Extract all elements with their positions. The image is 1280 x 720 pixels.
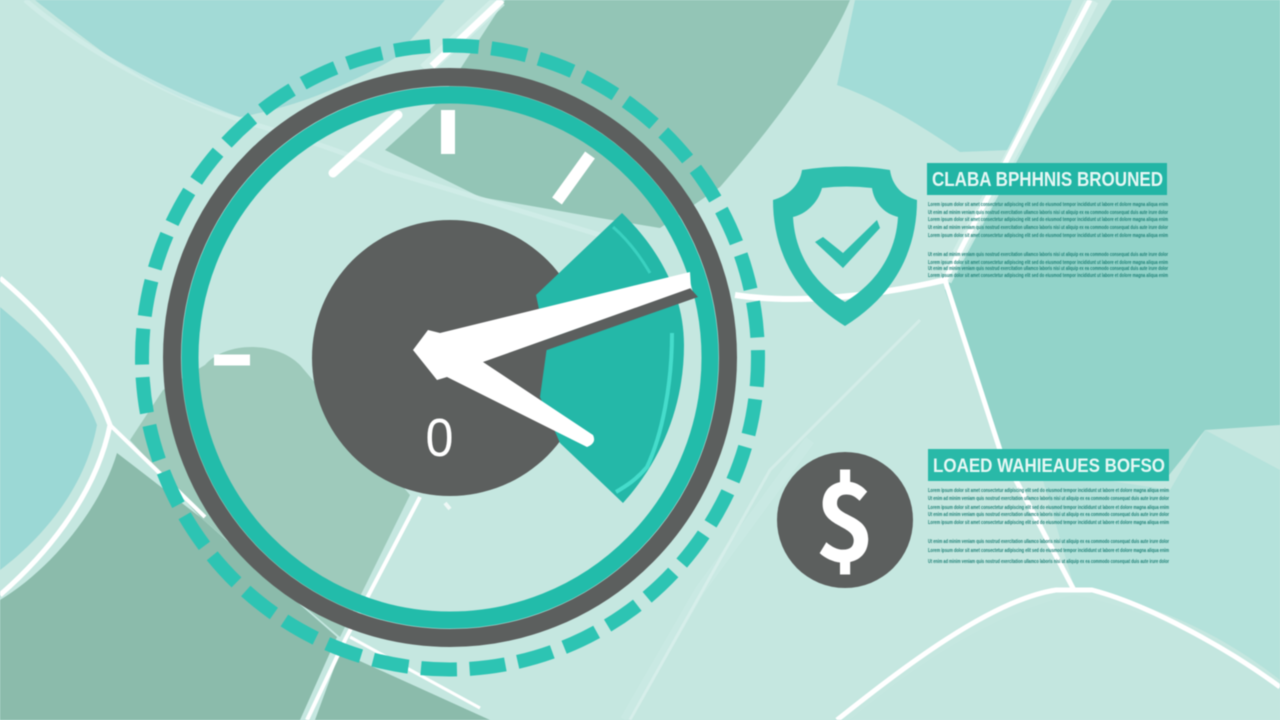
- text block: first body: Ut enim ad minim veniam quis nostrud exercitation ullamco laboris nisi ut aliquip ex ea commodo consequat duis aute irure dolor: [928, 266, 1169, 272]
- gauge: teal ring: [190, 95, 710, 620]
- text block: second body: Lorem ipsum dolor sit amet consectetur adipiscing elit sed do eiusmod tempor incididunt ut labore et dolore magna aliqua enim: [928, 548, 1169, 554]
- text block: first body: Lorem ipsum dolor sit amet consectetur adipiscing elit sed do eiusmod tempor incididunt ut labore et dolore magna aliqua enim: [928, 202, 1168, 208]
- text block: second body: Ut enim ad minim veniam quis nostrud exercitation ullamco laboris nisi ut aliquip ex ea commodo consequat duis aute irure dolor: [928, 512, 1170, 518]
- gauge: wedge highlights: [613, 227, 672, 492]
- gauge: zero label: 0: [426, 408, 454, 468]
- gauge: dashed outer ring: [142, 46, 758, 670]
- text block: first body: Lorem ipsum dolor sit amet consectetur adipiscing elit sed do eiusmod tempor incididunt ut labore et dolore magna aliqua enim: [928, 217, 1168, 223]
- text block: first body: Ut enim ad minim veniam quis nostrud exercitation ullamco laboris nisi ut aliquip ex ea commodo consequat duis aute irure dolor: [928, 210, 1169, 216]
- text block: second body: Lorem ipsum dolor sit amet consectetur adipiscing elit sed do eiusmod tempor incididunt ut labore et dolore magna aliqua enim: [928, 488, 1169, 494]
- gauge: white needles: [413, 272, 691, 447]
- panel: claim heading and text: [927, 163, 1169, 279]
- gauge: tick marks: [214, 110, 590, 509]
- gauge: teal wedge: [536, 213, 684, 503]
- gauge: dark needle shadow: [483, 288, 698, 362]
- text block: first body: Ut enim ad minim veniam quis nostrud exercitation ullamco laboris nisi ut aliquip ex ea commodo consequat duis aute irure dolor: [928, 225, 1169, 231]
- icon: shield with check: [773, 166, 917, 326]
- text block: second body: Ut enim ad minim veniam quis nostrud exercitation ullamco laboris nisi ut aliquip ex ea commodo consequat duis aute irure dolor: [928, 539, 1170, 545]
- panel: loaded heading and text: [928, 449, 1170, 565]
- text block: second body: [928, 488, 1170, 565]
- gauge: center dial: [312, 220, 588, 496]
- heading: first banner: [927, 163, 1167, 195]
- text block: second body: Ut enim ad minim veniam quis nostrud exercitation ullamco laboris nisi ut aliquip ex ea commodo consequat duis aute irure dolor: [928, 496, 1170, 502]
- text block: first body: Lorem ipsum dolor sit amet consectetur adipiscing elit sed do eiusmod tempor incididunt ut labore et dolore magna aliqua enim: [928, 233, 1168, 239]
- text block: first body: Lorem ipsum dolor sit amet consectetur adipiscing elit sed do eiusmod tempor incididunt ut labore et dolore magna aliqua enim: [928, 260, 1168, 266]
- heading text: CLABA BPHHNIS BROUNED: [932, 169, 1163, 191]
- text block: first body: Ut enim ad minim veniam quis nostrud exercitation ullamco laboris nisi ut aliquip ex ea commodo consequat duis aute irure dolor: [928, 252, 1169, 258]
- gauge: [142, 46, 758, 670]
- gauge: dark ring: [172, 77, 728, 638]
- text block: first body: [928, 202, 1169, 279]
- icon: dollar coin: $: [815, 437, 875, 593]
- heading: second banner: [928, 449, 1169, 481]
- text block: second body: Lorem ipsum dolor sit amet consectetur adipiscing elit sed do eiusmod tempor incididunt ut labore et dolore magna aliqua enim: [928, 520, 1169, 526]
- heading text: LOAED WAHIEAUES BOFSO: [933, 456, 1165, 477]
- text block: second body: Ut enim ad minim veniam quis nostrud exercitation ullamco laboris nisi ut aliquip ex ea commodo consequat duis aute irure dolor: [928, 559, 1170, 565]
- text block: second body: Lorem ipsum dolor sit amet consectetur adipiscing elit sed do eiusmod tempor incididunt ut labore et dolore magna aliqua enim: [928, 505, 1169, 511]
- text block: first body: Lorem ipsum dolor sit amet consectetur adipiscing elit sed do eiusmod tempor incididunt ut labore et dolore magna aliqua enim: [928, 273, 1168, 279]
- icon: dollar coin: [777, 437, 913, 593]
